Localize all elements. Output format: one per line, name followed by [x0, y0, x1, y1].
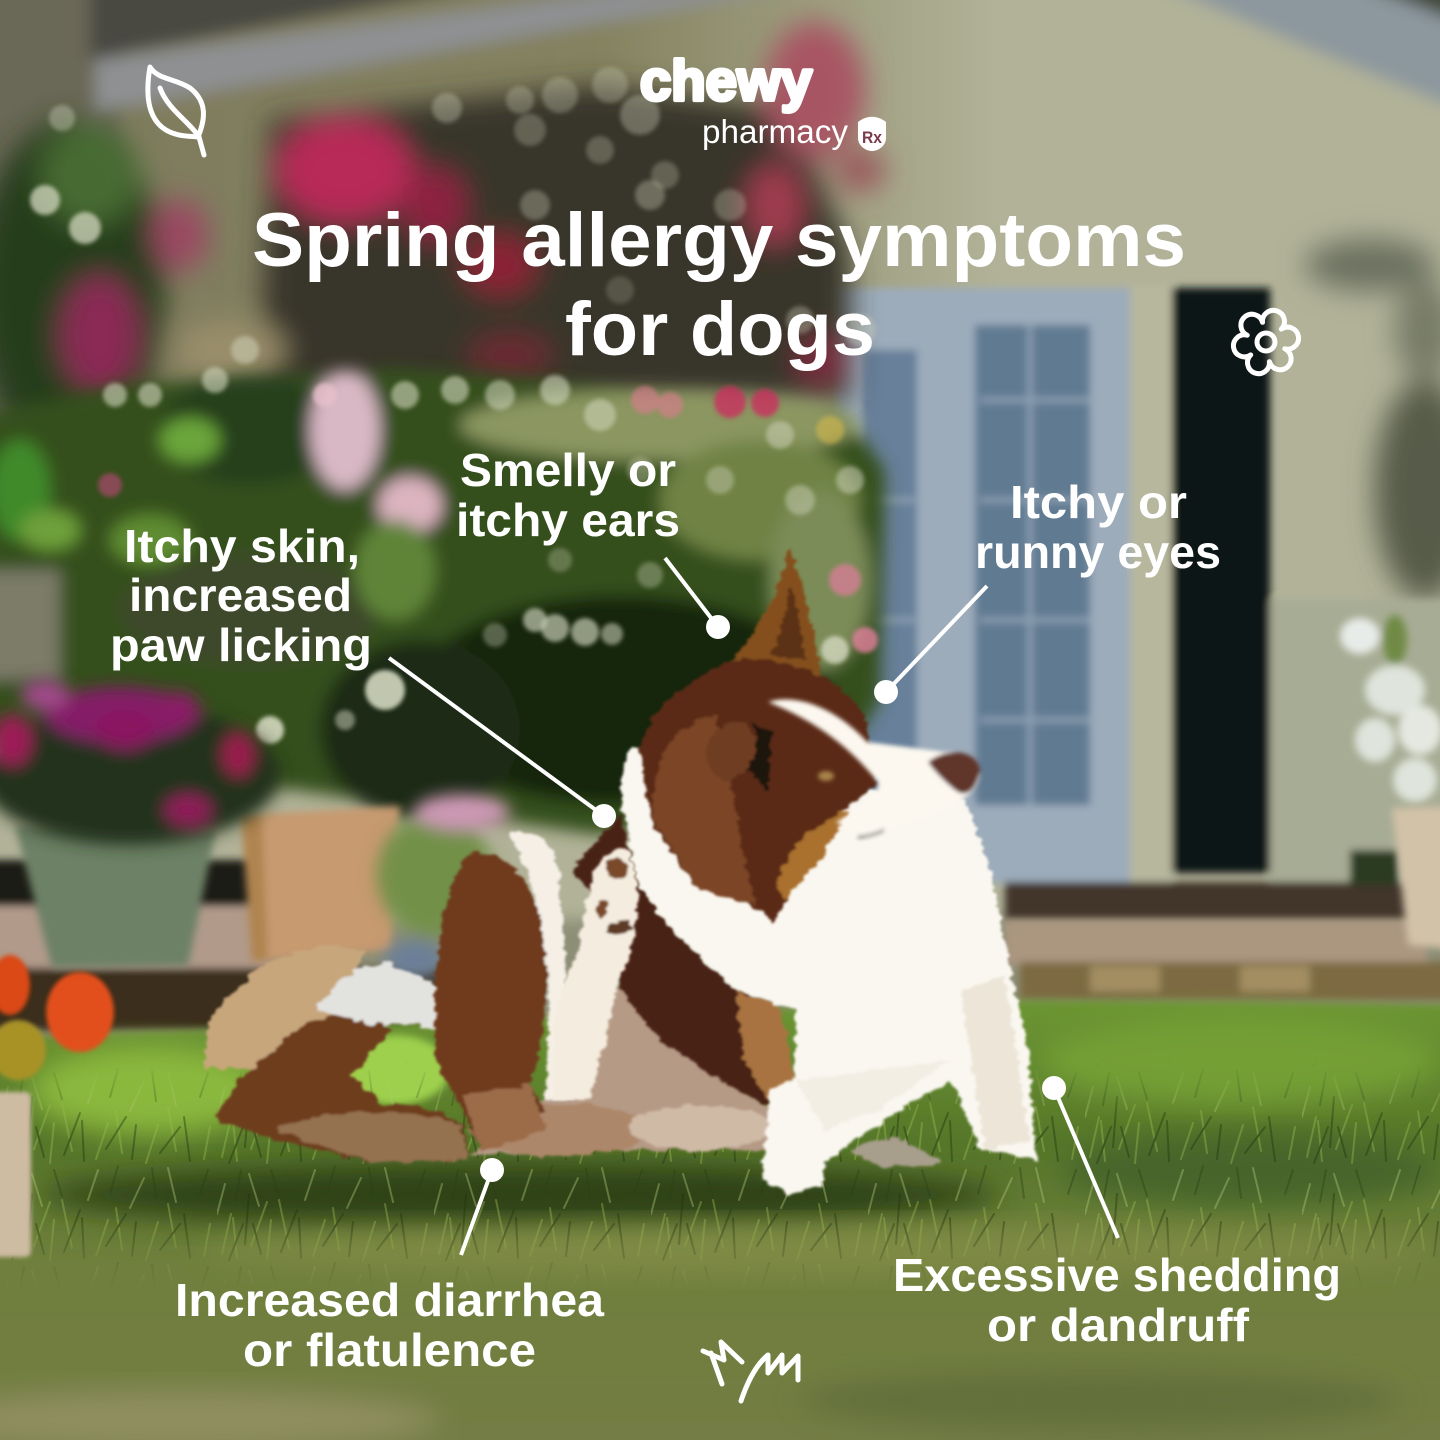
logo: chewy pharmacy: [640, 49, 886, 151]
french doors and dark doorway: [835, 285, 1440, 920]
brown back: [572, 815, 796, 1105]
belly and haunch: [435, 831, 775, 1156]
head: brown face and ear: [639, 550, 878, 922]
callout: increased diarrhea or flatulence: [175, 1158, 604, 1376]
icon: Rx shield: [858, 117, 886, 151]
callout: smelly or itchy ears: [456, 444, 730, 639]
callout: excessive shedding or dandruff: [893, 1076, 1341, 1351]
title: [252, 198, 1186, 372]
icon: flower: [1233, 310, 1299, 374]
callout: increased diarrhea or flatulence: Increased diarrhea: [175, 1274, 604, 1326]
callout: itchy skin, increased paw licking: Itchy skin,: [124, 520, 360, 572]
icon: leaf: [148, 67, 204, 155]
dog: [203, 550, 1036, 1195]
title: for dogs: [565, 287, 875, 372]
callout: itchy skin, increased paw licking: increased: [129, 569, 352, 621]
callout: itchy or runny eyes: [874, 476, 1221, 704]
callout: excessive shedding or dandruff: or dandruff: [987, 1299, 1250, 1351]
callout: increased diarrhea or flatulence: or flatulence: [243, 1324, 536, 1376]
white blooms right: [1340, 615, 1440, 802]
icon: Rx shield: Rx: [862, 128, 882, 147]
callout: excessive shedding or dandruff: Excessive shedding: [893, 1249, 1341, 1301]
title: Spring allergy symptoms: [252, 198, 1186, 283]
callout: itchy or runny eyes: Itchy or: [1010, 476, 1187, 528]
callout: itchy skin, increased paw licking: [110, 520, 616, 828]
pharmacy wordmark: pharmacy: [702, 113, 849, 150]
patio and stone edge: [0, 860, 1440, 1030]
vines on right wall: [1305, 239, 1440, 600]
house wall and roof: [0, 0, 1440, 920]
tail: [203, 943, 500, 1162]
icon: grass: [703, 1342, 798, 1401]
white blaze and muzzle: [768, 699, 980, 837]
flower pots: [15, 806, 1440, 968]
callout: itchy or runny eyes: runny eyes: [975, 526, 1221, 578]
raised hind leg and paw: [552, 848, 637, 1100]
lawn: [0, 1000, 1440, 1440]
foreground orange flowers and white pot: [0, 955, 114, 1257]
chewy wordmark: chewy: [640, 49, 812, 113]
upper foliage and pink flowers: [0, 22, 885, 460]
callout: smelly or itchy ears: itchy ears: [456, 494, 680, 546]
callout: itchy skin, increased paw licking: paw licking: [110, 619, 372, 671]
potted flowers: [0, 680, 510, 980]
white neck, chest and legs: [622, 745, 1036, 1195]
callout: smelly or itchy ears: Smelly or: [460, 444, 676, 496]
hedge: [0, 368, 885, 835]
bokeh highlights: [30, 67, 878, 744]
